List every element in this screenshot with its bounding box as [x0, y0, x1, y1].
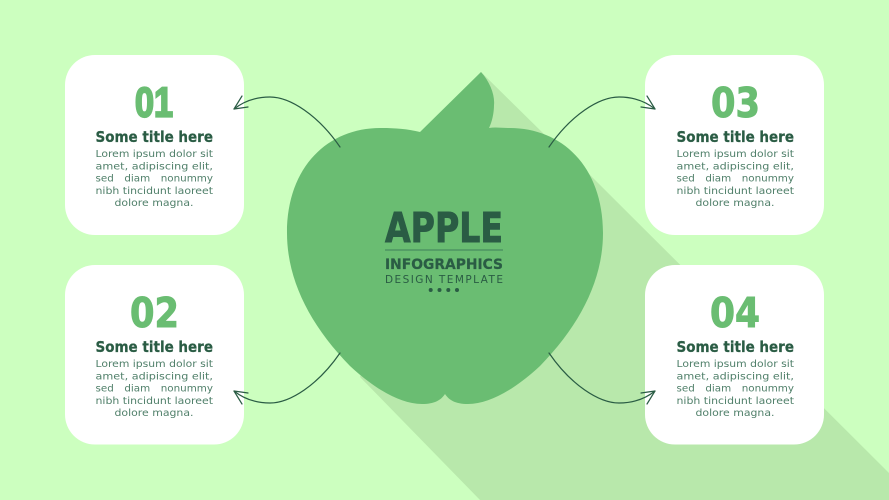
card body text: [676, 359, 794, 419]
card title: Some title here: [96, 128, 213, 146]
card body text: dolore magna.: [696, 408, 774, 419]
arrow: apple to card 03: [549, 96, 655, 147]
card body text: amet, adipiscing elit,: [676, 371, 794, 382]
card title: Some title here: [96, 338, 213, 356]
card body text: nibh tincidunt laoreet: [676, 396, 794, 407]
subheading: DESIGN TEMPLATE: DESIGN TEMPLATE: [385, 274, 503, 286]
number 01: 01: [135, 78, 173, 126]
arrow: apple to card 04: [549, 353, 655, 404]
panel: card 01: [65, 55, 244, 235]
card body text: nibh tincidunt laoreet: [96, 186, 213, 197]
center title: [385, 204, 503, 292]
subheading: INFOGRAPHICS: INFOGRAPHICS: [385, 257, 503, 273]
card body text: nibh tincidunt laoreet: [676, 186, 794, 197]
number 04: 04: [710, 289, 760, 337]
card body text: Lorem ipsum dolor sit: [676, 149, 794, 160]
heading: APPLE: APPLE: [385, 204, 503, 252]
card body text: [96, 149, 213, 209]
card body text: Lorem ipsum dolor sit: [676, 359, 794, 370]
card body text: dolore magna.: [114, 408, 194, 419]
card body text: sed diam nonummy: [676, 384, 794, 395]
card body text: amet, adipiscing elit,: [96, 371, 213, 382]
card body text: sed diam nonummy: [96, 174, 213, 185]
card body text: Lorem ipsum dolor sit: [96, 149, 213, 160]
arrow: apple to card 02: [234, 353, 340, 404]
apple long shadow: [360, 72, 889, 500]
arrow: apple to card 01: [234, 96, 340, 147]
panel: card 04: [645, 265, 824, 444]
card body text: sed diam nonummy: [96, 384, 213, 395]
apple shape: [287, 72, 603, 404]
four dots: [429, 288, 459, 292]
card body text: dolore magna.: [114, 198, 194, 209]
card title: Some title here: [676, 338, 794, 356]
card body text: dolore magna.: [696, 198, 774, 209]
heading rule: [385, 250, 503, 251]
panel: card 03: [645, 55, 824, 235]
number 03: 03: [711, 79, 760, 127]
card body text: sed diam nonummy: [676, 174, 794, 185]
card body text: amet, adipiscing elit,: [676, 161, 794, 172]
card body text: [676, 149, 794, 209]
number 02: 02: [130, 289, 179, 337]
card title: Some title here: [676, 128, 794, 146]
card body text: [96, 359, 213, 419]
card body text: amet, adipiscing elit,: [96, 161, 213, 172]
card body text: nibh tincidunt laoreet: [96, 396, 213, 407]
panel: card 02: [65, 265, 244, 444]
card body text: Lorem ipsum dolor sit: [96, 359, 213, 370]
